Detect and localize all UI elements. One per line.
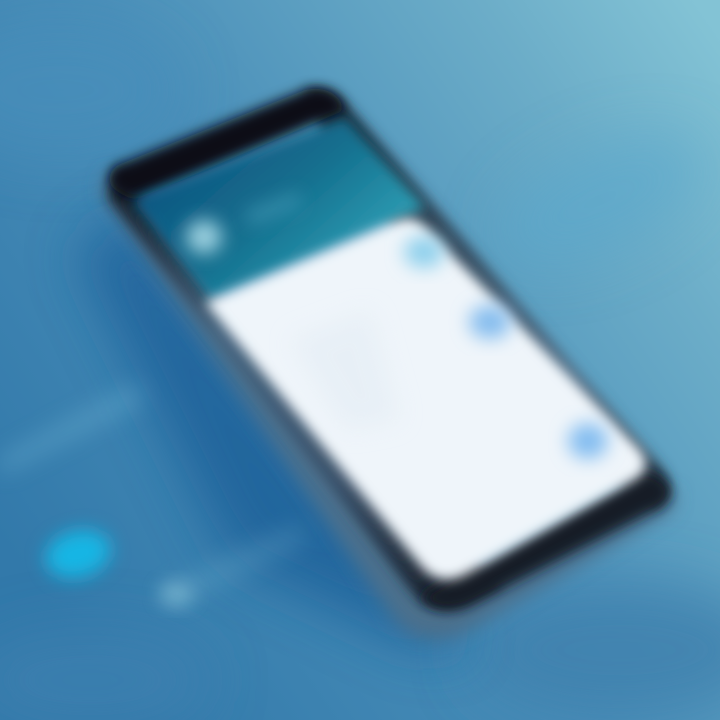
screen body — [205, 219, 646, 580]
light streak — [0, 385, 145, 475]
phone top bezel — [109, 89, 345, 200]
screen shading — [290, 310, 400, 430]
blue button three — [568, 423, 608, 459]
blue button two — [469, 305, 511, 339]
blue button one — [404, 236, 444, 268]
header icon — [186, 220, 222, 254]
phone bottom bezel — [420, 470, 670, 610]
small pale dot — [159, 582, 193, 606]
glowing cyan dot — [40, 523, 116, 585]
phone — [100, 88, 676, 639]
light streak lower — [165, 525, 305, 605]
phone drop shadow — [75, 210, 470, 650]
phone side edge — [100, 170, 676, 639]
phone right bezel — [305, 88, 670, 508]
phone left bezel — [108, 165, 500, 607]
screen header — [132, 118, 425, 300]
header title — [245, 192, 302, 226]
